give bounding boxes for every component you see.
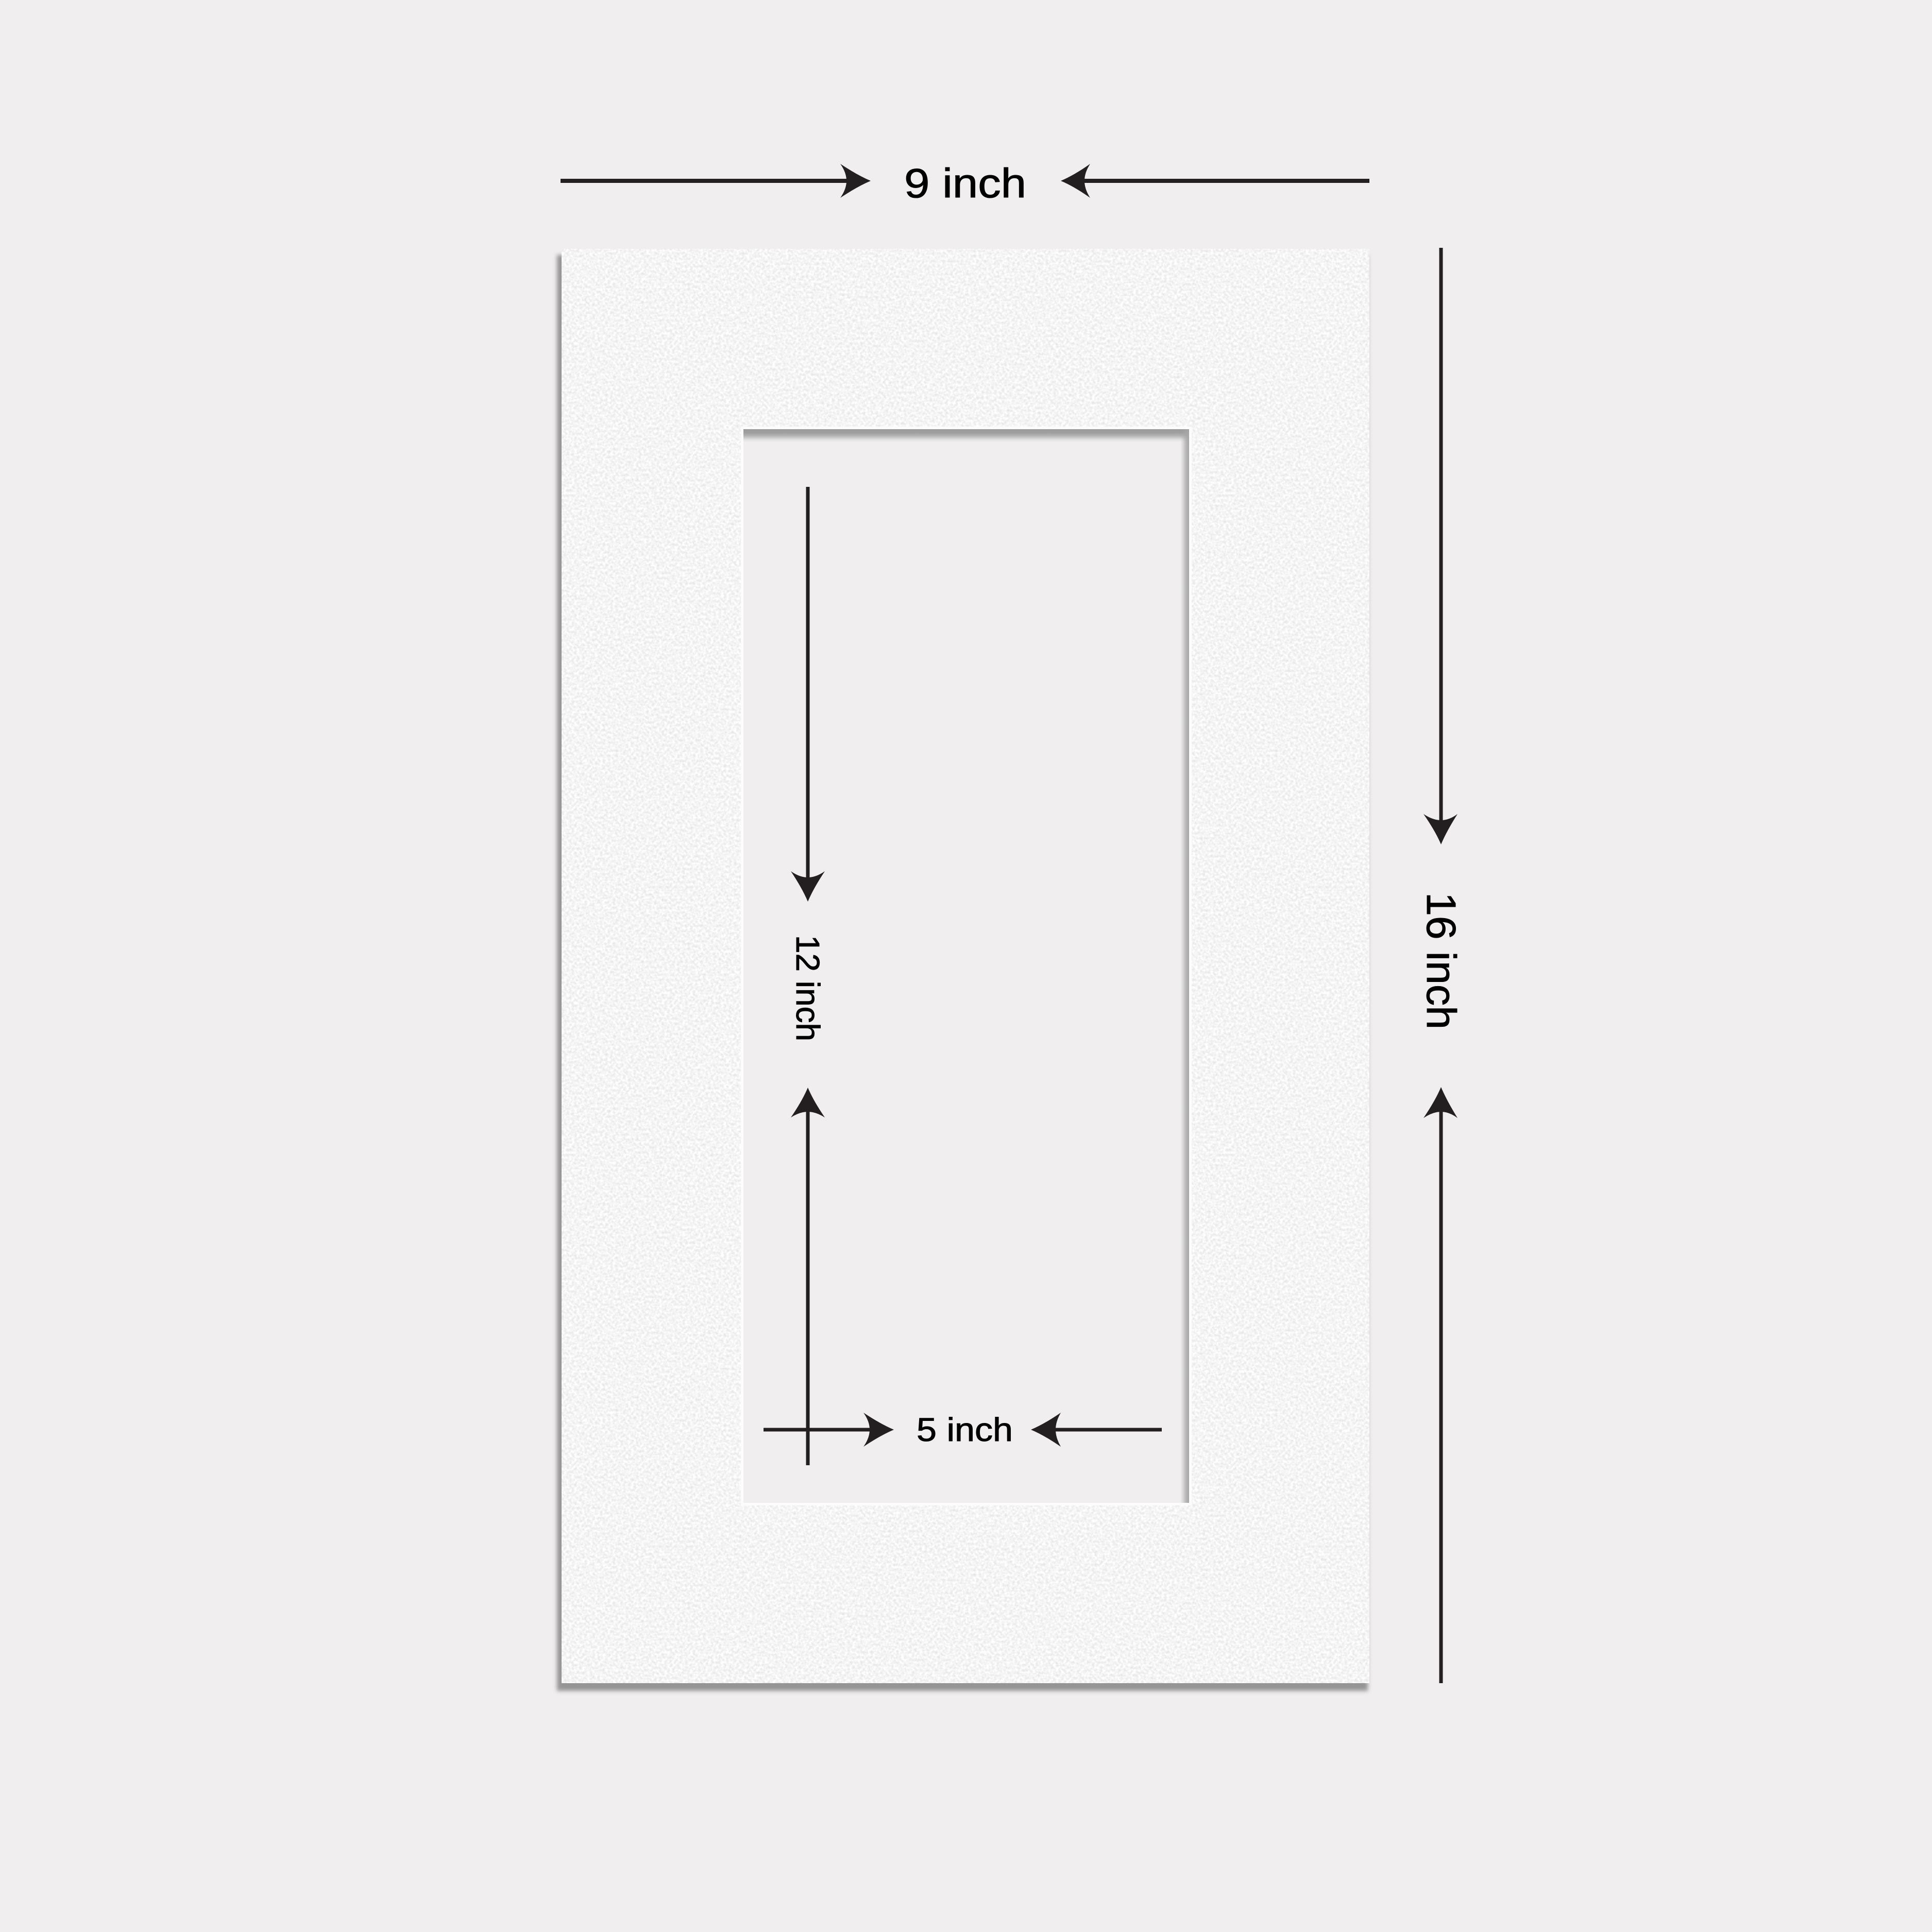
- window opening: [743, 429, 1189, 1503]
- arrow: bottom, pointing up: [791, 1088, 825, 1465]
- dimension: 16 inch height: [1418, 248, 1464, 1683]
- arrow: right, pointing left: [1061, 164, 1369, 198]
- window bevel lip: [742, 428, 1190, 1504]
- arrow: top, pointing down: [1423, 248, 1458, 844]
- arrow: left, pointing right: [561, 164, 871, 198]
- arrow: bottom, pointing up: [1423, 1087, 1458, 1683]
- textured mat panel: [562, 249, 1369, 1683]
- label: 16 inch: 16 inch: [1418, 892, 1464, 1029]
- label: 5 inch: 5 inch: [917, 1411, 1013, 1448]
- dimension: 9 inch width: [561, 160, 1369, 206]
- label: 9 inch: 9 inch: [904, 160, 1026, 206]
- arrow: left, pointing right: [764, 1413, 894, 1447]
- dimension: 5 inch window width: [764, 1411, 1162, 1448]
- arrow: top, pointing down: [791, 487, 825, 902]
- mat board with window opening: [557, 249, 1369, 1691]
- dimension: 12 inch window height: [789, 487, 826, 1465]
- arrow: right, pointing left: [1031, 1413, 1162, 1447]
- window inner shadow: [743, 429, 1189, 1503]
- label: 12 inch: 12 inch: [789, 935, 826, 1041]
- mat drop shadow: [557, 255, 1368, 1691]
